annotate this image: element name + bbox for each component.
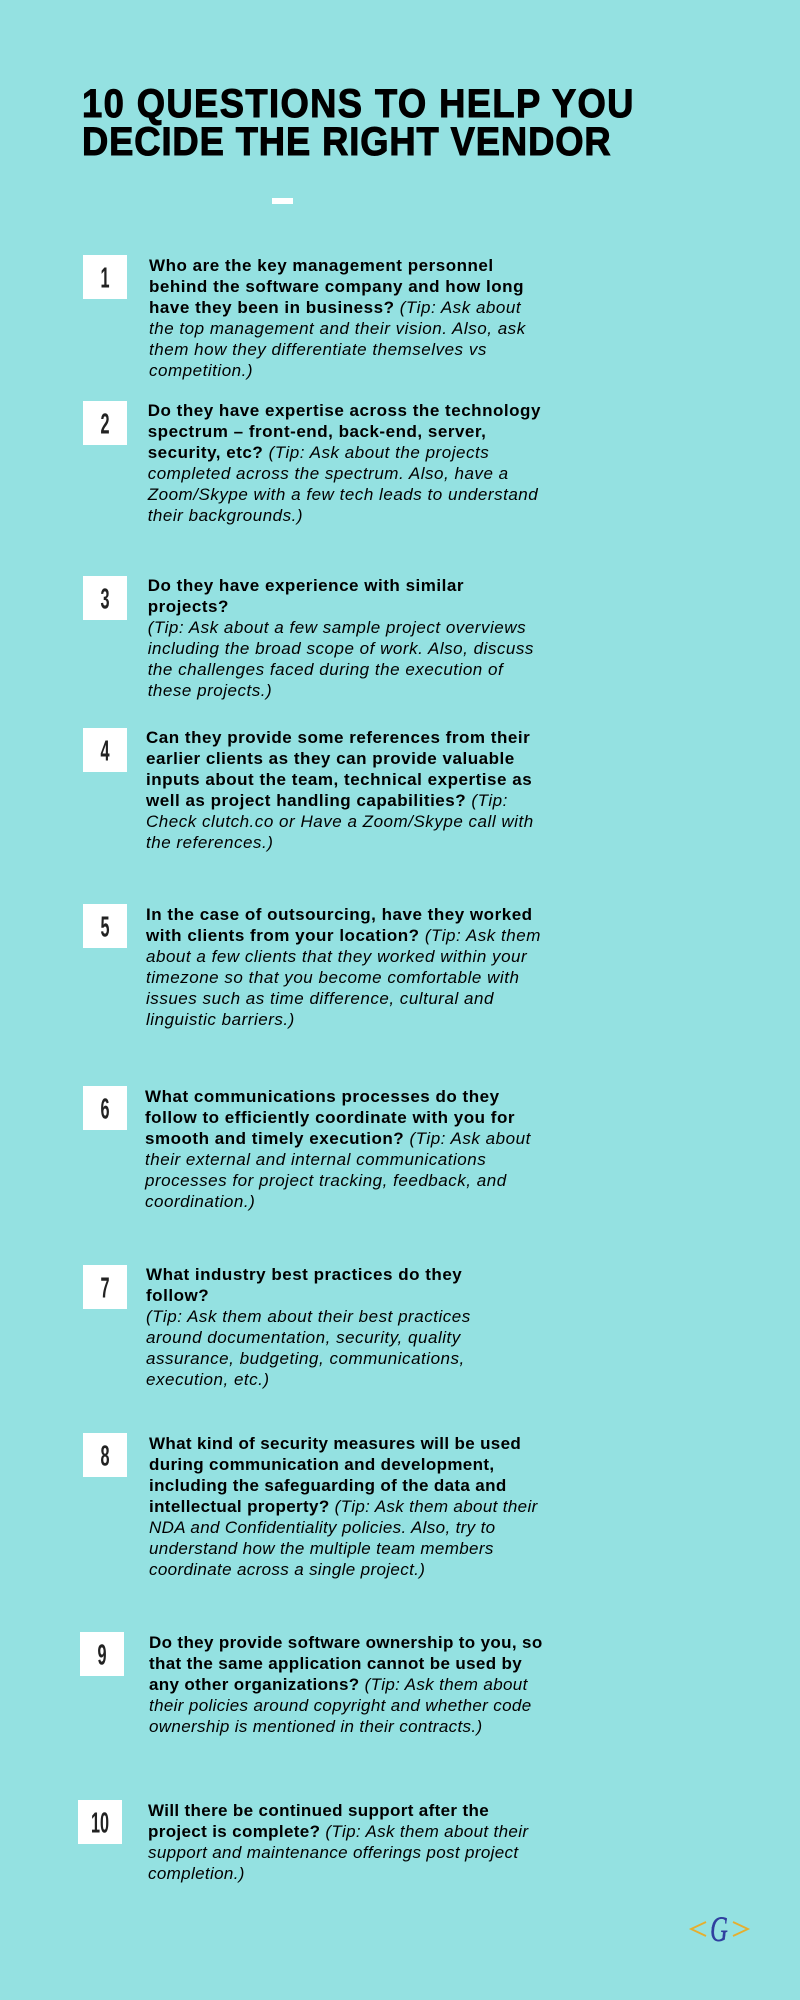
question 3 bbox=[148, 576, 534, 700]
question 3: Do they have experience with similar bbox=[148, 576, 464, 595]
number box 5 bbox=[82, 904, 126, 948]
question 9: any other organizations? (Tip: Ask them about bbox=[149, 1675, 528, 1694]
question 6: What communications processes do they bbox=[145, 1087, 500, 1106]
question 5: issues such as time difference, cultural and bbox=[146, 989, 494, 1008]
question 4: the references.) bbox=[146, 833, 273, 852]
question 8: What kind of security measures will be used bbox=[149, 1434, 521, 1453]
question 9: Do they provide software ownership to you, so bbox=[149, 1633, 543, 1652]
number box 2: 2 bbox=[100, 408, 109, 440]
question 5: timezone so that you become comfortable with bbox=[146, 968, 519, 987]
question 3: these projects.) bbox=[148, 681, 272, 700]
number box 8 bbox=[82, 1433, 126, 1477]
question 2: Zoom/Skype with a few tech leads to understand bbox=[148, 485, 538, 504]
question 4 bbox=[146, 728, 534, 852]
number box 1 bbox=[82, 255, 126, 299]
number box 4: 4 bbox=[100, 736, 109, 768]
question 2: completed across the spectrum. Also, have a bbox=[148, 464, 509, 483]
question 1: behind the software company and how long bbox=[149, 277, 524, 296]
question 10: support and maintenance offerings post project bbox=[148, 1843, 518, 1862]
question 7: execution, etc.) bbox=[146, 1370, 270, 1389]
number box 3 bbox=[82, 576, 126, 620]
question 1: have they been in business? (Tip: Ask about bbox=[149, 298, 521, 317]
question 5: In the case of outsourcing, have they worked bbox=[146, 905, 533, 924]
question 9: their policies around copyright and whether code bbox=[149, 1696, 532, 1715]
question 3: including the broad scope of work. Also, discuss bbox=[148, 639, 534, 658]
question 1: the top management and their vision. Also, ask bbox=[149, 319, 526, 338]
question 6: processes for project tracking, feedback, and bbox=[145, 1171, 507, 1190]
question 2 bbox=[147, 401, 541, 525]
question 1: them how they differentiate themselves vs bbox=[149, 340, 487, 359]
question 7: (Tip: Ask them about their best practices bbox=[146, 1307, 471, 1326]
question 4: earlier clients as they can provide valuable bbox=[146, 749, 515, 768]
question 9: that the same application cannot be used by bbox=[149, 1654, 522, 1673]
question 4: Can they provide some references from their bbox=[146, 728, 530, 747]
number box 9 bbox=[80, 1632, 124, 1676]
number box 7: 7 bbox=[100, 1272, 109, 1304]
question 4: inputs about the team, technical expertise as bbox=[146, 770, 532, 789]
question 5 bbox=[146, 905, 541, 1029]
question 1: competition.) bbox=[149, 361, 253, 380]
question 10 bbox=[148, 1801, 529, 1883]
question 1 bbox=[149, 256, 526, 380]
number box 10: 10 bbox=[91, 1808, 109, 1840]
question 10: project is complete? (Tip: Ask them about their bbox=[148, 1822, 528, 1841]
question 5: linguistic barriers.) bbox=[146, 1010, 295, 1029]
title: DECIDE THE RIGHT VENDOR bbox=[82, 119, 611, 164]
question 6: their external and internal communications bbox=[145, 1150, 486, 1169]
question 7: follow? bbox=[146, 1286, 209, 1305]
question 8: understand how the multiple team members bbox=[149, 1539, 494, 1558]
question 8: including the safeguarding of the data and bbox=[149, 1476, 507, 1495]
question 7: assurance, budgeting, communications, bbox=[146, 1349, 465, 1368]
number box 8: 8 bbox=[100, 1440, 109, 1472]
number box 10 bbox=[78, 1800, 122, 1844]
question 10: Will there be continued support after the bbox=[148, 1801, 489, 1820]
question 2: security, etc? (Tip: Ask about the projects bbox=[148, 443, 489, 462]
number box 7 bbox=[82, 1265, 126, 1309]
question 4: well as project handling capabilities? (Tip: bbox=[146, 791, 508, 810]
title: 10 QUESTIONS TO HELP YOU bbox=[82, 81, 633, 126]
number box 5: 5 bbox=[100, 912, 109, 944]
question 7 bbox=[146, 1265, 471, 1389]
question 2: their backgrounds.) bbox=[148, 506, 303, 525]
question 2: Do they have expertise across the technology bbox=[148, 401, 541, 420]
number box 1: 1 bbox=[100, 262, 109, 294]
number box 3: 3 bbox=[100, 584, 109, 616]
question 5: about a few clients that they worked within your bbox=[146, 947, 527, 966]
question 8: during communication and development, bbox=[149, 1455, 494, 1474]
question 3: projects? bbox=[148, 597, 229, 616]
question 3: (Tip: Ask about a few sample project overviews bbox=[148, 618, 526, 637]
question 4: Check clutch.co or Have a Zoom/Skype call with bbox=[146, 812, 534, 831]
question 8: coordinate across a single project.) bbox=[149, 1560, 425, 1579]
question 9: ownership is mentioned in their contracts.) bbox=[149, 1717, 482, 1736]
question 9 bbox=[149, 1633, 543, 1736]
number box 6 bbox=[82, 1086, 126, 1130]
question 7: around documentation, security, quality bbox=[146, 1328, 461, 1347]
number box 4 bbox=[82, 728, 126, 772]
title bbox=[82, 81, 633, 164]
question 8 bbox=[149, 1434, 538, 1579]
question 5: with clients from your location? (Tip: Ask them bbox=[146, 926, 541, 945]
number box 9: 9 bbox=[97, 1640, 107, 1672]
question 6: smooth and timely execution? (Tip: Ask about bbox=[145, 1129, 531, 1148]
question 3: the challenges faced during the execution of bbox=[148, 660, 503, 679]
question 6: follow to efficiently coordinate with you for bbox=[145, 1108, 515, 1127]
logo bbox=[689, 1909, 750, 1949]
number box 2 bbox=[82, 401, 126, 445]
question 1: Who are the key management personnel bbox=[149, 256, 494, 275]
logo: G bbox=[710, 1909, 728, 1949]
dash accent bbox=[272, 198, 293, 204]
question 6 bbox=[144, 1087, 531, 1211]
question 8: intellectual property? (Tip: Ask them about their bbox=[149, 1497, 538, 1516]
number box 6: 6 bbox=[100, 1094, 109, 1126]
question 7: What industry best practices do they bbox=[146, 1265, 462, 1284]
question 10: completion.) bbox=[148, 1864, 245, 1883]
question 2: spectrum – front-end, back-end, server, bbox=[148, 422, 486, 441]
question 8: NDA and Confidentiality policies. Also, try to bbox=[149, 1518, 496, 1537]
question 6: coordination.) bbox=[145, 1192, 255, 1211]
